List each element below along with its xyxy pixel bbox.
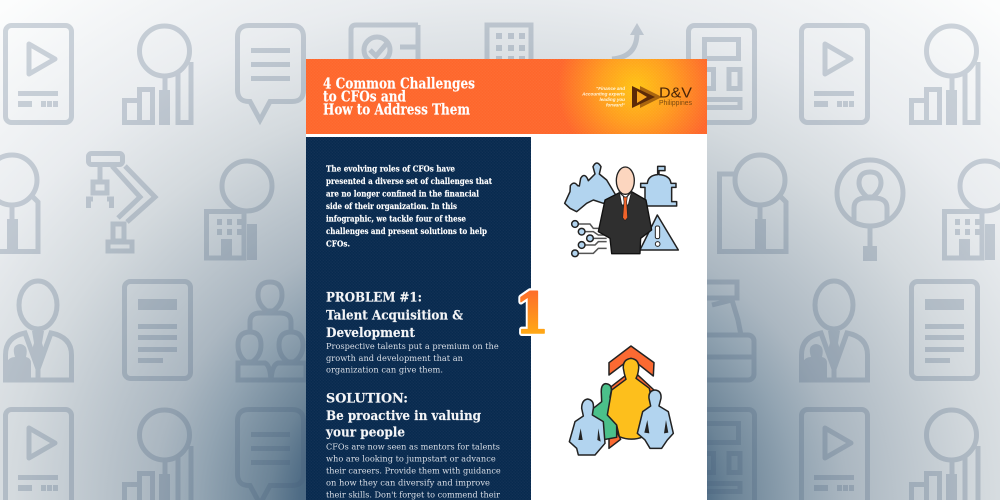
title: 4 Common Challenges (323, 76, 475, 92)
number badge 1: 1 (515, 281, 549, 347)
icon: magnifier chart bottom (124, 410, 191, 500)
icon: magnifier chart (124, 26, 191, 125)
title (323, 76, 475, 118)
icon: play document bottom right (802, 410, 868, 500)
logo tagline (581, 86, 626, 108)
number badge 1: 1 (515, 281, 549, 347)
map of people (565, 163, 617, 212)
icon: magnifier building right (944, 161, 1000, 260)
white page panel (306, 134, 707, 500)
logo tagline: forward" (606, 102, 626, 108)
government building (640, 166, 677, 206)
solution text: who are looking to jumpstart or advance (326, 454, 496, 464)
title: How to Address Them (323, 102, 471, 118)
logo tagline: "Finance and (596, 86, 625, 91)
green person (589, 384, 617, 441)
logo mark (632, 86, 662, 108)
solution heading (325, 391, 481, 441)
icon: stacked books with figure (690, 282, 754, 380)
solution text: CFOs are now seen as mentors for talents (326, 442, 500, 452)
solution text: their careers. Provide them with guidance (326, 466, 501, 476)
growth chevrons (609, 346, 654, 448)
intro paragraph (326, 164, 492, 249)
logo tagline: leading you (599, 97, 625, 102)
logo wordmark: D&V (659, 84, 692, 102)
intro paragraph: side of their organization. In this (326, 201, 457, 211)
problem text: growth and development that an (326, 354, 463, 364)
problem heading: Talent Acquisition & (326, 308, 463, 323)
icon: magnifier chart bottom right (912, 410, 978, 500)
icon: magnifier chart right (912, 26, 978, 125)
circuit lines (572, 221, 607, 257)
icon: layout document bottom (688, 410, 754, 500)
solution heading: your people (325, 426, 405, 441)
navy text panel (306, 137, 531, 500)
icon: play document top right (802, 26, 868, 122)
illustration: talent growth team (569, 346, 673, 455)
icon: magnifier document right (720, 155, 786, 252)
intro paragraph: CFOs. (326, 239, 350, 249)
yellow person (607, 358, 653, 439)
intro paragraph: challenges and present solutions to help (326, 226, 487, 236)
warning triangle (640, 215, 678, 250)
icon: office building (487, 25, 531, 85)
intro paragraph: are no longer confined in the financial (326, 189, 479, 199)
blue person left (569, 399, 605, 455)
header banner (306, 59, 707, 134)
title: to CFOs and (323, 88, 406, 106)
icon: report document (124, 282, 190, 378)
solution text: their skills. Don't forget to commend their (326, 490, 501, 500)
logo wordmark: Philippines (659, 100, 692, 107)
icon: checklist (351, 25, 420, 80)
logo wordmark (659, 84, 692, 107)
problem text: Prospective talents put a premium on the (326, 342, 499, 352)
shirt and tie (619, 192, 632, 221)
icon: layout document (688, 26, 754, 122)
intro paragraph: infographic, we tackle four of these (326, 214, 466, 224)
icon: speech bubble (238, 26, 304, 120)
icon: team of people (238, 282, 306, 380)
problem heading: Development (326, 326, 415, 341)
solution text: on how they can diversify and improve (326, 478, 490, 488)
intro paragraph: The evolving roles of CFOs have (326, 164, 455, 174)
solution heading: Be proactive in valuing (326, 409, 481, 424)
icon: play document bottom left (6, 410, 72, 500)
icon: businessman left (6, 281, 72, 380)
solution text (326, 442, 501, 500)
icon: person in magnifier (837, 160, 903, 261)
icon: magnifier building left (206, 161, 272, 260)
icon: magnifier document left (0, 155, 38, 252)
icon: speech bubble bottom (238, 410, 304, 500)
icon: report document right (912, 282, 978, 378)
solution heading: SOLUTION: (326, 391, 408, 406)
illustration: CFO with challenges (565, 163, 678, 257)
problem heading: PROBLEM #1: (326, 291, 422, 306)
businessman suit (598, 192, 652, 254)
icon: growth arrow (612, 23, 644, 59)
icon: robot arm (88, 154, 155, 251)
logo tagline: Accounting experts (581, 92, 625, 96)
blue person right (637, 390, 673, 448)
problem heading (326, 291, 463, 341)
problem text: organization can give them. (326, 366, 443, 376)
problem text (326, 342, 499, 376)
head (616, 167, 634, 194)
icon: play document top left (6, 26, 72, 122)
intro paragraph: presented a diverse set of challenges that (326, 176, 492, 186)
icon: businessman right (802, 281, 868, 380)
